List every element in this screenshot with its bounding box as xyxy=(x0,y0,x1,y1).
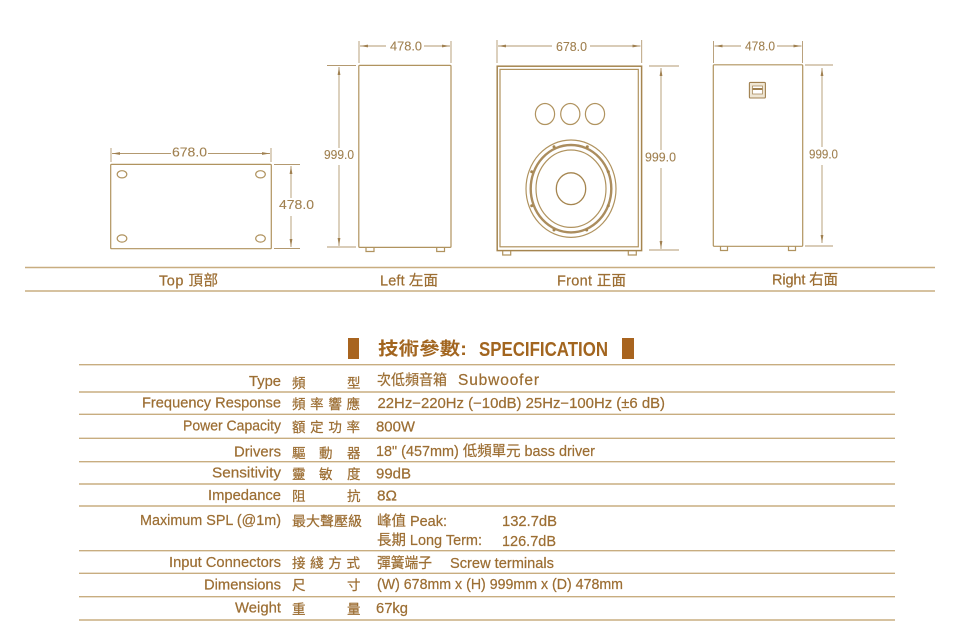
row: power capacity: Power Capacity xyxy=(183,418,282,434)
row: maximum SPL: 峰值 Peak: xyxy=(377,513,447,530)
dimension: left width: 478.0 xyxy=(390,40,422,54)
dimension: top depth xyxy=(274,164,314,248)
row: type: 頻 xyxy=(292,376,306,391)
row: drivers xyxy=(234,443,595,461)
dimension: left width xyxy=(359,40,451,63)
row: drivers: 18" (457mm) 低頻單元 bass driver xyxy=(376,443,595,460)
row: type xyxy=(249,371,539,391)
caption: top: Top 頂部 xyxy=(159,272,218,290)
row: maximum SPL: 長期 Long Term: xyxy=(377,532,482,549)
row: maximum SPL: Maximum SPL (@1m) xyxy=(140,513,281,529)
front view cabinet outline xyxy=(497,66,642,251)
row: sensitivity: Sensitivity xyxy=(212,466,282,482)
dimension: front height xyxy=(645,66,679,250)
row: frequency response: 22Hz−220Hz (−10dB) 25Hz−100Hz (±6 dB) xyxy=(378,396,665,412)
icon: terminal plate xyxy=(749,82,765,98)
caption: front: Front 正面 xyxy=(557,274,626,290)
caption: left: Left 左面 xyxy=(380,272,438,290)
dimension: front height: 999.0 xyxy=(645,150,676,164)
row: sensitivity xyxy=(212,466,411,482)
row: input connectors: 接綫方式 xyxy=(292,555,360,571)
row: drivers: 驅 xyxy=(292,446,306,461)
row: sensitivity: 敏 xyxy=(319,467,333,482)
dimension: top depth: 478.0 xyxy=(279,198,314,212)
row: sensitivity: 99dB xyxy=(376,466,411,482)
caption: right: Right 右面 xyxy=(772,272,838,288)
heading: specification title: SPECIFICATION xyxy=(479,339,608,361)
specification table xyxy=(79,365,895,620)
row: dimensions: 寸 xyxy=(347,578,360,593)
row: maximum SPL xyxy=(140,513,557,550)
row: power capacity xyxy=(183,418,415,436)
heading: specification title xyxy=(348,338,634,361)
row: impedance: 阻 xyxy=(292,489,306,504)
panel: front view drawing xyxy=(497,40,679,255)
row: impedance: Impedance xyxy=(208,488,281,504)
dimension: top width: 678.0 xyxy=(172,146,207,160)
row: weight: 量 xyxy=(347,602,360,617)
row: drivers: 動 xyxy=(319,446,332,461)
row: weight: 重 xyxy=(292,602,306,617)
row: dimensions xyxy=(204,577,623,594)
row: weight: 67kg xyxy=(376,601,408,617)
row: type: Type xyxy=(249,374,281,390)
panel: top view drawing xyxy=(111,146,314,249)
row: frequency response: 頻率響應 xyxy=(292,396,360,412)
row: power capacity: 800W xyxy=(376,420,415,436)
row: impedance: 抗 xyxy=(347,489,361,504)
row: sensitivity: 靈 xyxy=(292,467,306,482)
row: dimensions: (W) 678mm x (H) 999mm x (D) 478mm xyxy=(377,577,623,593)
row: frequency response xyxy=(142,396,665,412)
row: sensitivity: 度 xyxy=(347,467,360,482)
row: impedance xyxy=(208,488,397,504)
row: type: 型 xyxy=(347,376,360,391)
icon: cabinet feet holes xyxy=(117,171,265,242)
dimension: front width: 678.0 xyxy=(556,40,587,54)
row: input connectors: Input Connectors xyxy=(169,555,281,571)
row: drivers: 器 xyxy=(347,446,360,461)
dimension: right height xyxy=(805,65,838,246)
row: dimensions: Dimensions xyxy=(204,578,281,594)
dimension: right height: 999.0 xyxy=(809,148,838,162)
row: frequency response: Frequency Response xyxy=(142,396,281,412)
top view cabinet outline xyxy=(111,164,271,249)
row: drivers: Drivers xyxy=(234,444,281,460)
dimension: right width xyxy=(714,40,802,63)
dimension: right width: 478.0 xyxy=(745,40,775,54)
row: weight: Weight xyxy=(235,600,281,616)
row: maximum SPL: 132.7dB xyxy=(502,514,557,530)
right view cabinet outline xyxy=(713,65,803,246)
icon: three ports xyxy=(535,104,605,124)
row: impedance: 8Ω xyxy=(377,488,397,504)
heading: specification title: 技術參數: xyxy=(378,338,467,359)
row: input connectors: 彈簧端子 xyxy=(377,555,432,572)
row: type: 次低頻音箱 xyxy=(377,371,447,389)
icon: front view feet xyxy=(503,251,636,255)
row: power capacity: 額定功率 xyxy=(292,419,360,435)
row: type: Subwoofer xyxy=(458,372,539,389)
dimension: front width xyxy=(497,40,642,63)
dimension: top width xyxy=(111,146,271,162)
row: maximum SPL: 最大聲壓級 xyxy=(292,513,363,529)
dimension: left height xyxy=(324,66,356,247)
icon: right view feet xyxy=(720,246,796,250)
row: input connectors xyxy=(169,555,554,572)
panel: right view drawing xyxy=(713,40,838,250)
row: dimensions: 尺 xyxy=(292,578,306,593)
row: input connectors: Screw terminals xyxy=(450,556,554,572)
dimension: left height: 999.0 xyxy=(324,148,354,162)
row: weight xyxy=(235,600,408,617)
icon: bass driver xyxy=(526,140,616,237)
left view cabinet outline xyxy=(359,65,451,247)
view captions strip xyxy=(25,268,935,291)
panel: left view drawing xyxy=(324,40,451,252)
row: maximum SPL: 126.7dB xyxy=(502,534,556,550)
icon: left view feet xyxy=(366,248,444,252)
